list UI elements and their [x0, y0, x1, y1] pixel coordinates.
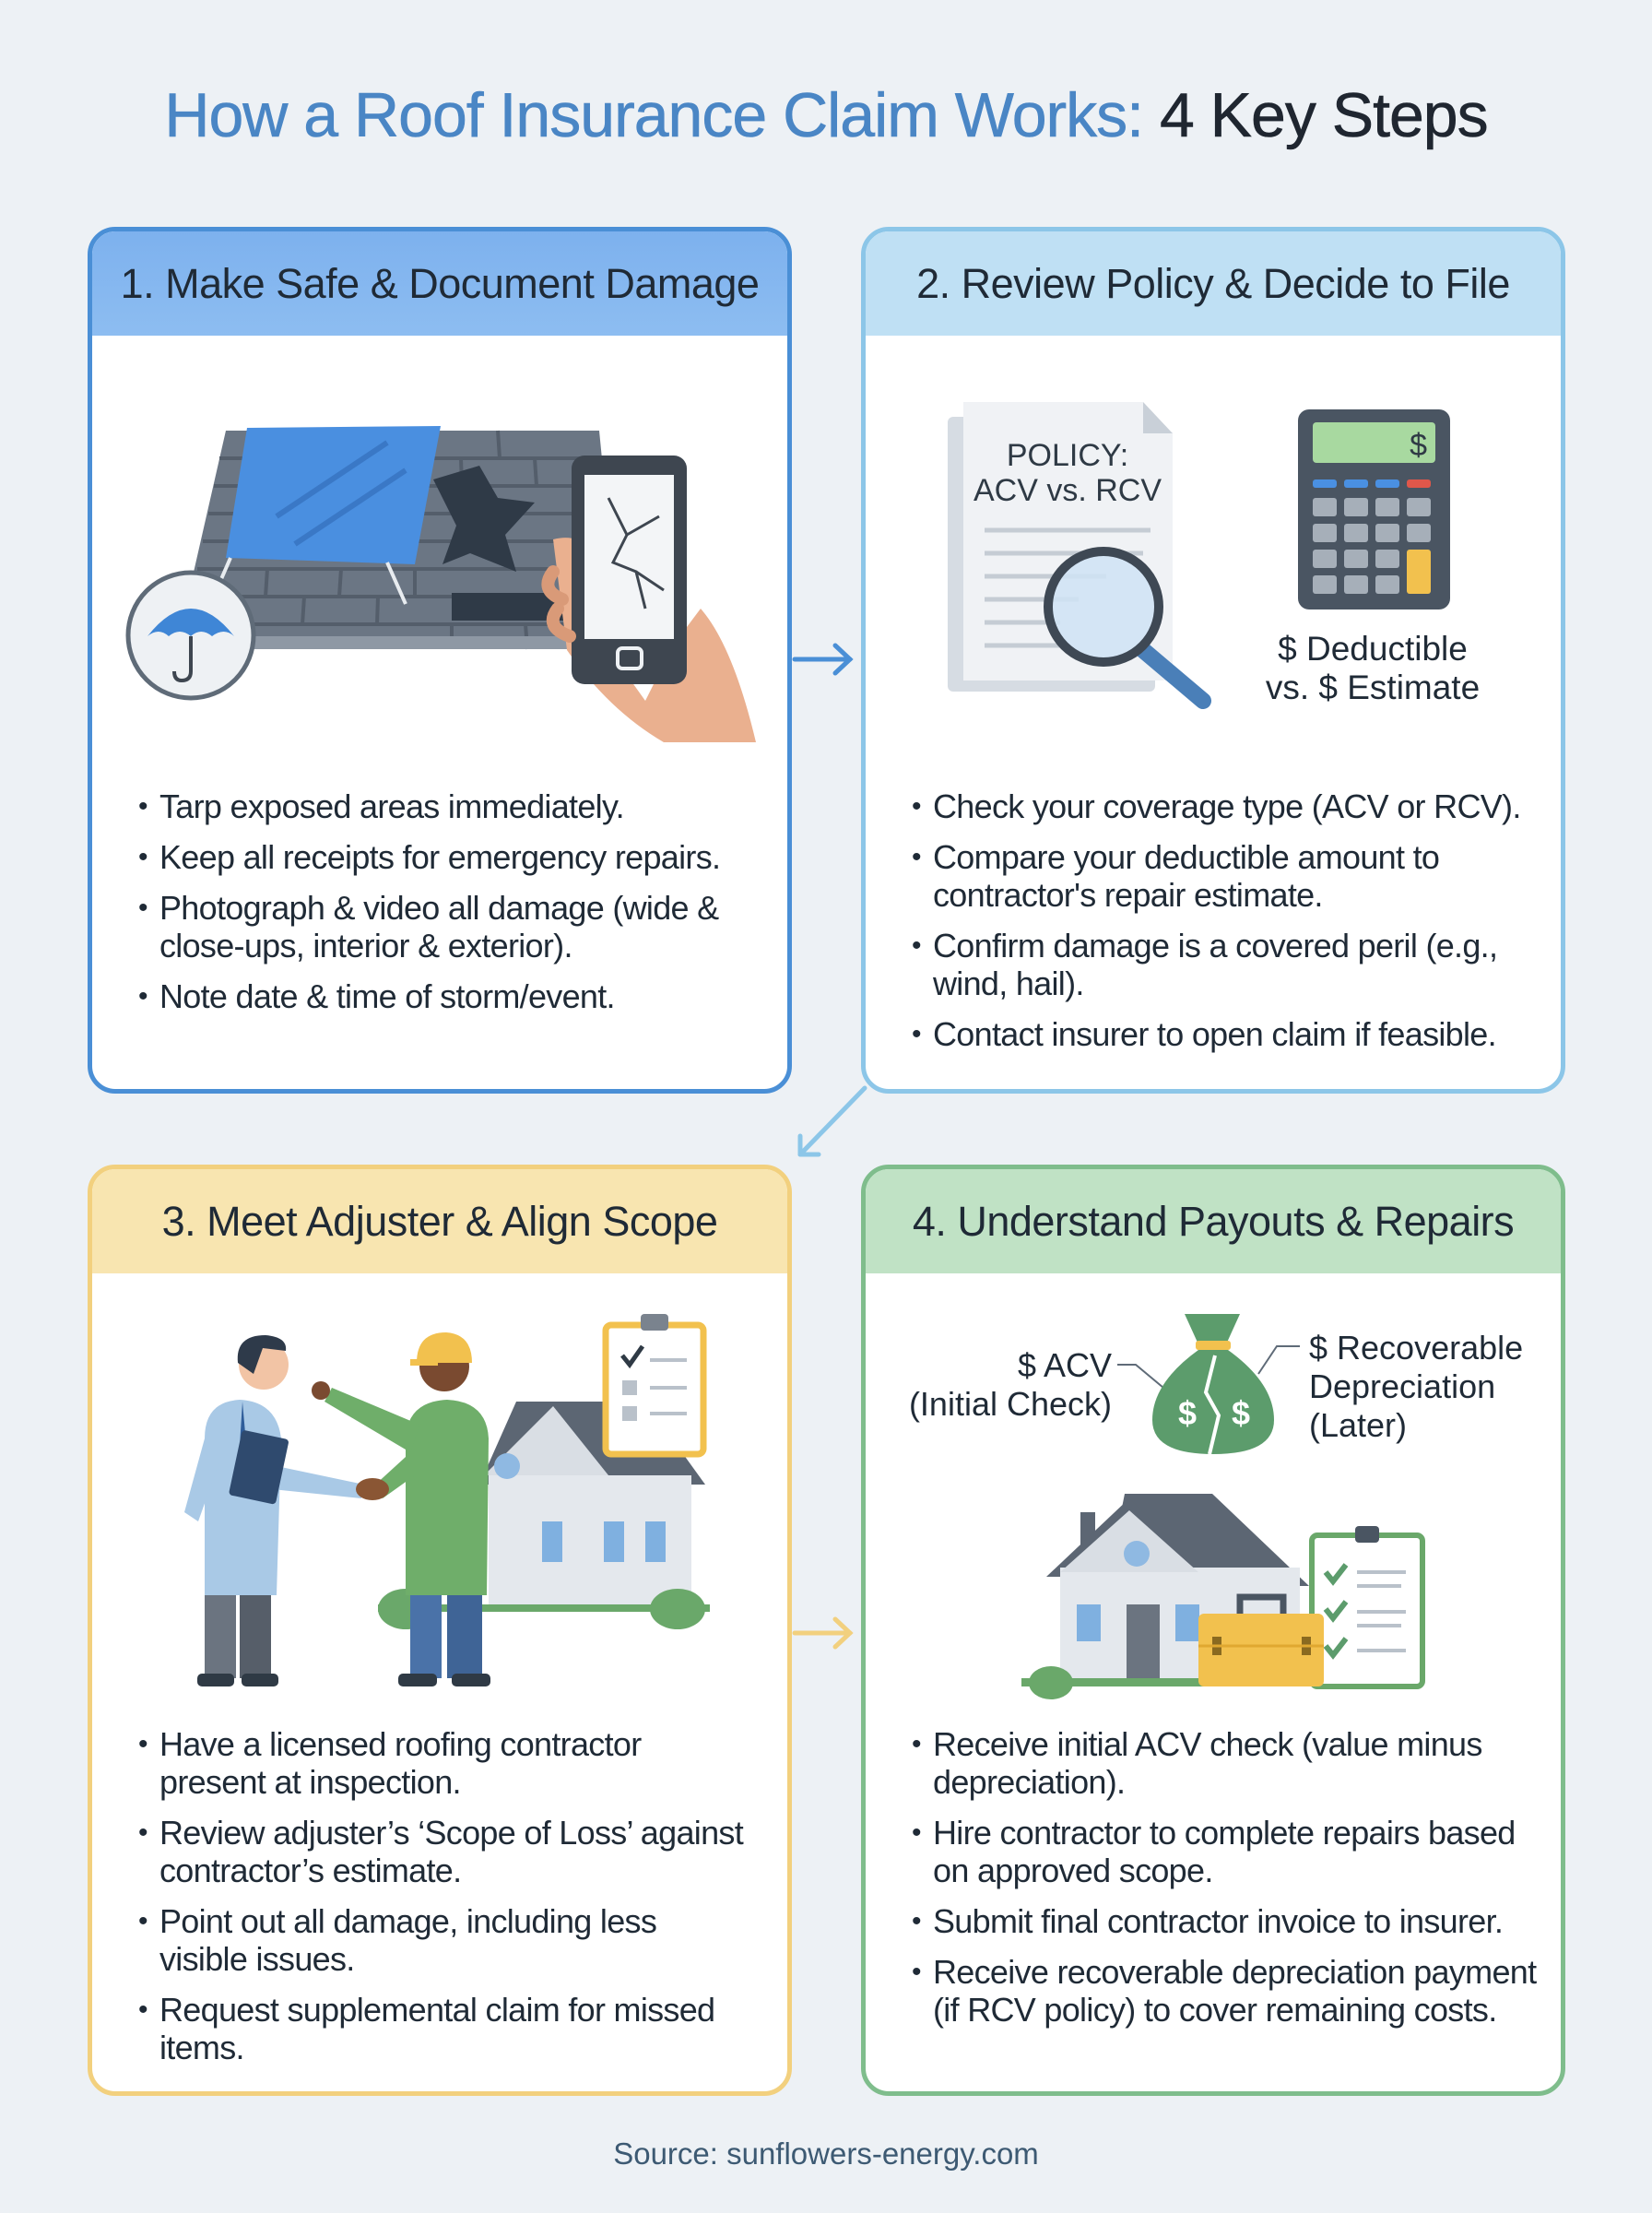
bullets: step 3 [139, 1725, 743, 2066]
person: contractor [312, 1332, 490, 1686]
bullets: step 3: Point out all damage, including less [159, 1902, 656, 1940]
bullets: step 4: depreciation). [933, 1763, 1125, 1801]
bullets: step 3: contractor’s estimate. [159, 1852, 461, 1889]
bullets: step 4: Receive recoverable depreciation payment [933, 1953, 1536, 1991]
icon: magnifier [1048, 551, 1203, 701]
icon: house with toolbox and checklist [1021, 1494, 1422, 1699]
label: recoverable depreciation [1309, 1329, 1523, 1444]
bullets: step 4: on approved scope. [933, 1852, 1213, 1889]
arrow: step 3 to 4 [795, 1619, 850, 1647]
header: step 3: 3. Meet Adjuster & Align Scope [162, 1198, 717, 1245]
arrow: step 2 to 3 [800, 1088, 865, 1154]
bullets: step 1: Note date & time of storm/event. [159, 977, 615, 1015]
bullets: step 1: Tarp exposed areas immediately. [159, 787, 624, 825]
label: deductible vs estimate: $ Deductible [1278, 630, 1468, 668]
illustration: policy document and calculator: ACV vs. RCV [974, 473, 1162, 508]
title: How a Roof Insurance Claim Works: 4 Key Steps [164, 80, 1488, 150]
label: ACV [909, 1346, 1112, 1423]
illustration: money bag and house [909, 1314, 1523, 1699]
panel: step 4 [861, 1165, 1565, 2096]
clipboard [606, 1314, 703, 1454]
illustration: adjuster and contractor [184, 1314, 710, 1686]
label: deductible vs estimate [1266, 630, 1480, 706]
icon: money bag [1152, 1314, 1274, 1454]
label: ACV: (Initial Check) [909, 1385, 1112, 1423]
bullets: step 1: Photograph & video all damage (wide & [159, 889, 719, 927]
panel: step 3 [88, 1165, 792, 2096]
source footer: Source: sunflowers-energy.com [613, 2136, 1039, 2171]
bullets: step 2 [913, 787, 1521, 1053]
bullets: step 2: Contact insurer to open claim if feasible. [933, 1015, 1496, 1053]
header: step 2 [866, 231, 1561, 336]
bullets: step 4: (if RCV policy) to cover remaining costs. [933, 1991, 1497, 2029]
illustration: policy document and calculator: POLICY: [1007, 438, 1128, 473]
icon: umbrella [128, 573, 254, 698]
bullets: step 3: visible issues. [159, 1940, 355, 1978]
header: step 2: 2. Review Policy & Decide to File [916, 260, 1510, 307]
panel: step 2 [861, 227, 1565, 1094]
bullets: step 3: Have a licensed roofing contractor [159, 1725, 642, 1763]
icon: phone in hand [548, 456, 756, 742]
label: ACV: $ ACV [1018, 1346, 1112, 1384]
header: step 1 [92, 231, 787, 336]
header: step 4 [866, 1169, 1561, 1273]
label: recoverable depreciation: Depreciation [1309, 1367, 1495, 1405]
person: adjuster [184, 1335, 364, 1686]
header: step 3 [92, 1169, 787, 1273]
bullets: step 4: Submit final contractor invoice to insurer. [933, 1902, 1503, 1940]
icon: calculator [1298, 409, 1450, 609]
bullets: step 4: Hire contractor to complete repairs based [933, 1814, 1516, 1852]
bullets: step 1: Keep all receipts for emergency repairs. [159, 838, 720, 876]
bullets: step 4: Receive initial ACV check (value minus [933, 1725, 1482, 1763]
arrow: step 1 to 2 [795, 645, 850, 673]
panel: step 1 [88, 227, 792, 1094]
bullets: step 1: close-ups, interior & exterior). [159, 927, 572, 964]
icon: money bag: $ [1178, 1394, 1197, 1432]
bullets: step 3: items. [159, 2029, 244, 2066]
icon: calculator: $ [1410, 428, 1427, 463]
label: deductible vs estimate: vs. $ Estimate [1266, 669, 1480, 706]
bullets: step 2: Check your coverage type (ACV or RCV). [933, 787, 1521, 825]
bullets: step 3: Request supplemental claim for missed [159, 1991, 714, 2029]
house [378, 1402, 710, 1629]
illustration: policy document and calculator [948, 402, 1480, 709]
bullets: step 2: Confirm damage is a covered peril (e.g., [933, 927, 1497, 964]
bullets: step 3: present at inspection. [159, 1763, 461, 1801]
bullets: step 1 [139, 787, 720, 1015]
label: recoverable depreciation: (Later) [1309, 1406, 1407, 1444]
label: recoverable depreciation: $ Recoverable [1309, 1329, 1523, 1367]
bullets: step 2: wind, hail). [933, 964, 1084, 1002]
illustration: roof tarp and phone [125, 426, 756, 742]
bullets: step 4 [913, 1725, 1537, 2029]
bullets: step 3: Review adjuster’s ‘Scope of Loss’ against [159, 1814, 743, 1852]
bullets: step 2: Compare your deductible amount to [933, 838, 1439, 876]
header: step 1: 1. Make Safe & Document Damage [121, 260, 759, 307]
icon: money bag: $ [1232, 1394, 1250, 1432]
header: step 4: 4. Understand Payouts & Repairs [913, 1198, 1514, 1245]
bullets: step 2: contractor's repair estimate. [933, 876, 1323, 914]
